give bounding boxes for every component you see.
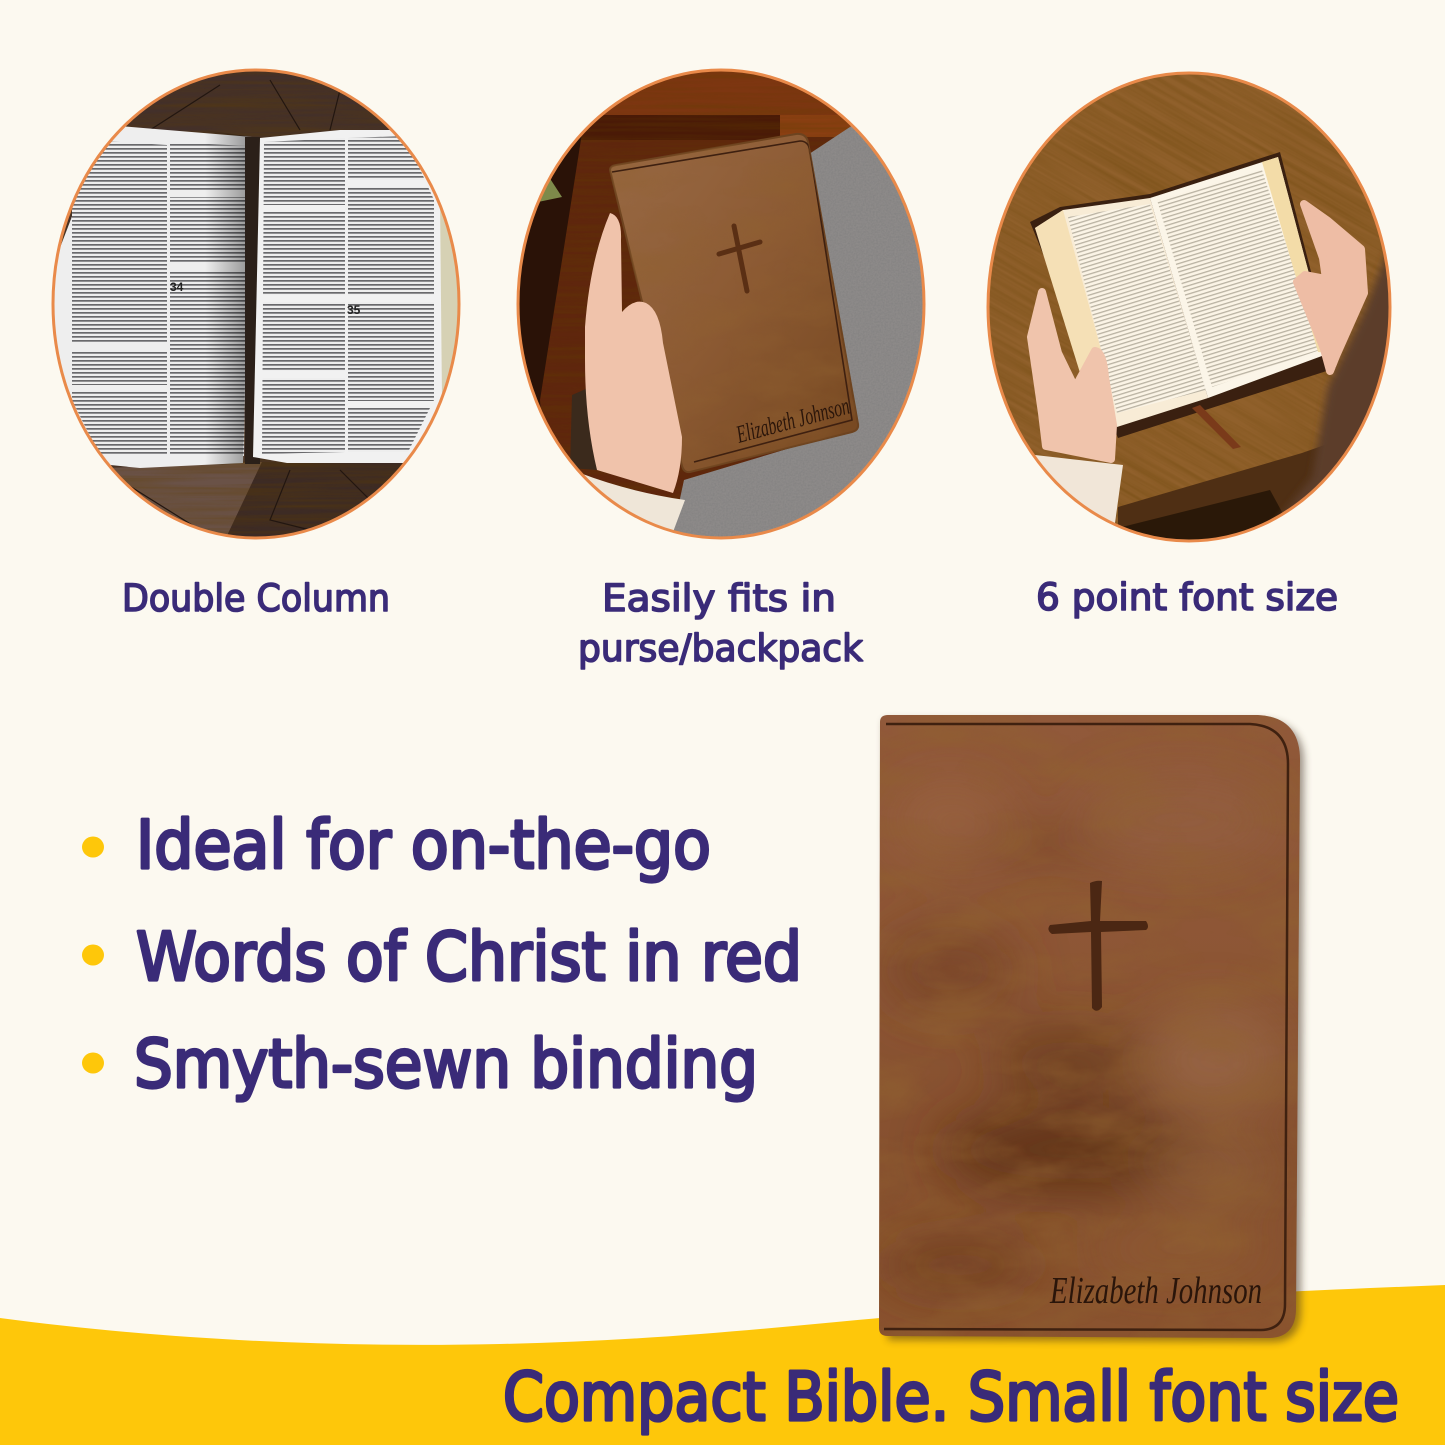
hair	[1278, 254, 1388, 515]
caption: font size: 6 point font size	[1036, 576, 1338, 619]
feature: binding: Smyth-sewn binding	[134, 1025, 758, 1103]
photo: open book held on table	[986, 72, 1392, 542]
sofa	[674, 126, 922, 536]
photo: book in hand	[515, 68, 930, 545]
caption: easily fits: Easily fits in	[602, 577, 836, 620]
bullet 1	[82, 836, 104, 858]
photo: open double column pages	[40, 68, 460, 543]
right page	[1150, 157, 1330, 398]
green ornament	[540, 180, 562, 202]
book cover underside	[1030, 152, 1336, 438]
caption: easily fits: purse/backpack	[578, 627, 864, 670]
left page	[1035, 198, 1208, 427]
engraved name: Elizabeth Johnson	[1049, 1270, 1262, 1312]
table front	[1118, 446, 1322, 526]
cross on cover	[719, 226, 760, 291]
spine gutter	[245, 137, 260, 464]
cream page edge	[440, 210, 458, 394]
large leather bible	[879, 715, 1304, 1342]
bullet 2	[82, 944, 104, 966]
right page text columns	[262, 136, 434, 454]
feature: words of Christ: Words of Christ in red	[136, 918, 802, 996]
engraved name: Elizabeth Johnson	[733, 393, 853, 449]
left page text columns	[72, 140, 248, 456]
right hand	[1297, 204, 1364, 371]
hand	[585, 213, 682, 493]
chapter number 35: 35	[347, 303, 361, 317]
embossed cross	[1048, 881, 1148, 1011]
book cover	[610, 134, 858, 472]
left sleeve	[1035, 455, 1123, 523]
knit sleeve	[578, 473, 685, 532]
feature list	[82, 806, 802, 1103]
yellow wave banner	[0, 1285, 1445, 1445]
right edge gilding	[1262, 157, 1321, 352]
chapter number 34: 34	[170, 280, 184, 294]
ribbon	[1192, 405, 1241, 449]
left edge gilding	[1035, 210, 1112, 405]
dark furniture	[520, 136, 582, 407]
feature: on-the-go: Ideal for on-the-go	[136, 806, 711, 884]
caption: easily fits	[578, 577, 864, 670]
caption: double column: Double Column	[122, 577, 390, 620]
dark knit cuff	[570, 385, 597, 470]
bullet 3	[82, 1052, 104, 1074]
left hand	[1031, 292, 1113, 459]
